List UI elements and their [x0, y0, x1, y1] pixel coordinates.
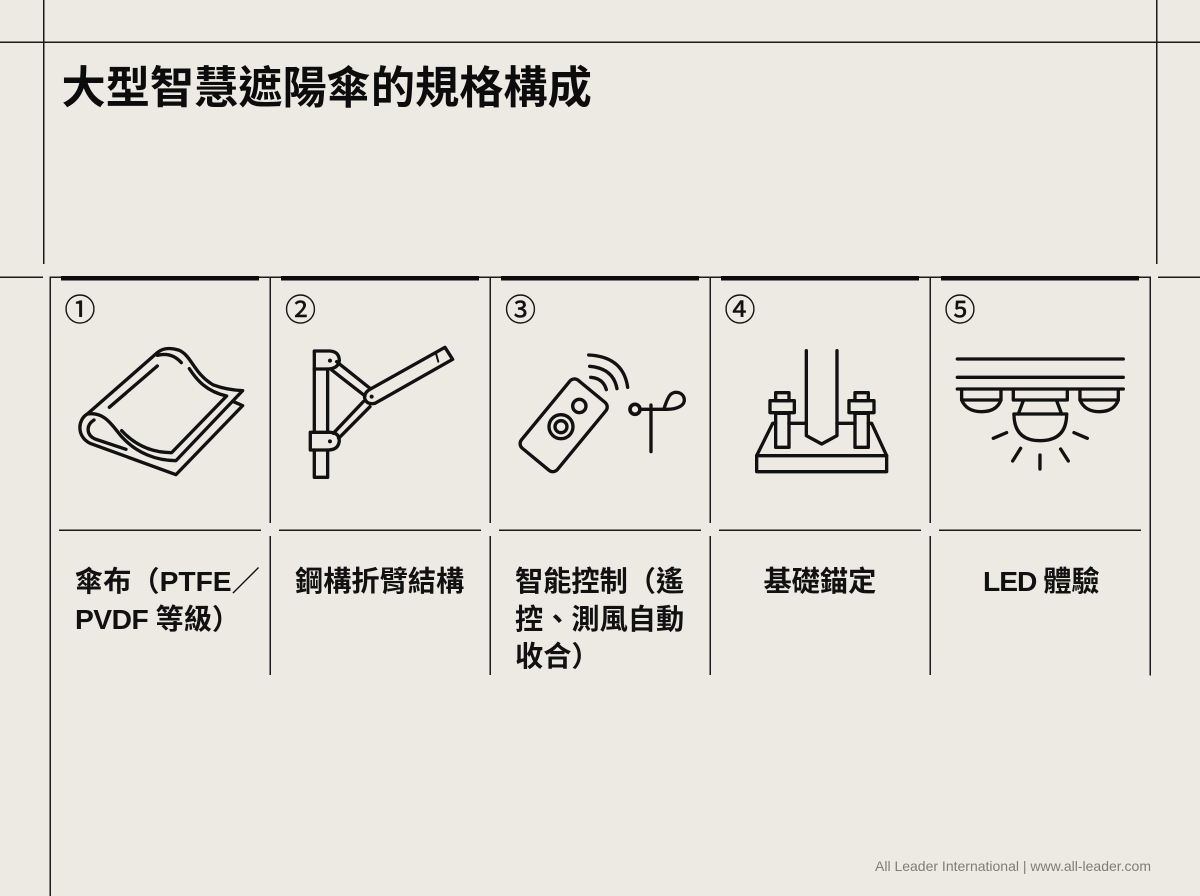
- label: smart control: 收合）: [515, 640, 600, 672]
- icon: foundation anchor: [757, 351, 887, 472]
- number 2: ②: [285, 292, 316, 328]
- label: smart control: 智能控制（遙: [515, 565, 684, 597]
- label: LED experience: LED 體驗: [983, 565, 1100, 597]
- label: canopy fabric: PVDF 等級）: [75, 602, 240, 634]
- label: steel folding arm: 鋼構折臂結構: [295, 565, 464, 597]
- number 1: ①: [64, 292, 96, 328]
- label: foundation anchoring: 基礎錨定: [764, 565, 876, 597]
- icon: steel folding arm: [310, 347, 453, 477]
- label: smart control: 控、測風自動: [515, 602, 684, 634]
- icon: remote control and wind sensor: [518, 355, 684, 474]
- number 4: ④: [724, 292, 756, 328]
- label: canopy fabric: [75, 565, 260, 634]
- title: 大型智慧遮陽傘的規格構成: [62, 64, 592, 113]
- icon: folded canopy fabric: [80, 348, 243, 475]
- label: canopy fabric: 傘布（PTFE／: [75, 565, 260, 597]
- icon: LED lights: [957, 359, 1123, 469]
- label: smart control: [515, 565, 684, 672]
- number 3: ③: [505, 292, 536, 328]
- number 5: ⑤: [944, 292, 976, 328]
- footer credit: All Leader International | www.all-leader.com: [875, 858, 1151, 874]
